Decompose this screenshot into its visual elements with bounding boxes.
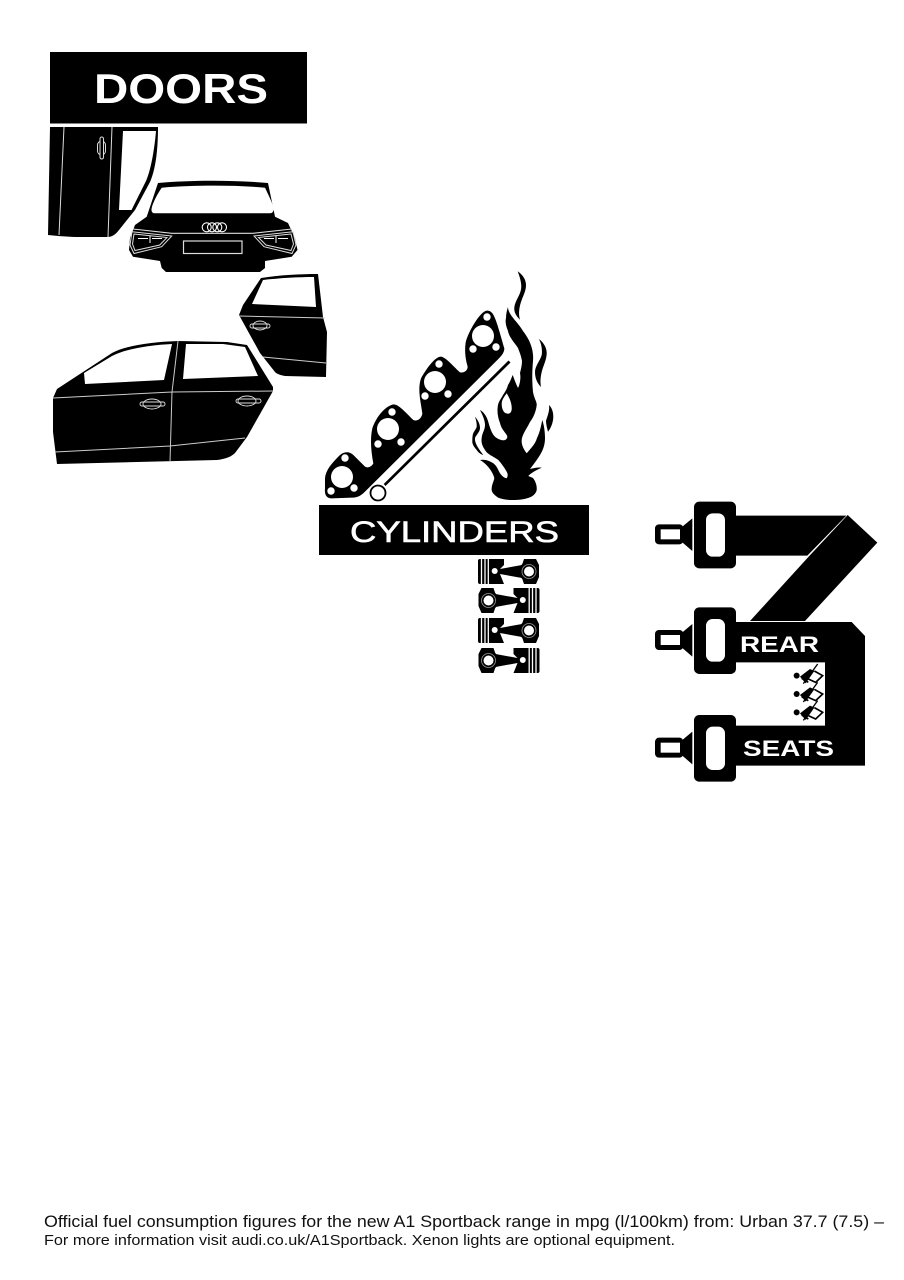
panel: four cylinders bbox=[319, 271, 589, 673]
icon: flame bbox=[472, 271, 553, 500]
text: REAR: REAR bbox=[740, 632, 819, 657]
icon: piston 3 bbox=[478, 618, 539, 643]
icon: seat belt strap forming the number 3 bbox=[735, 515, 877, 766]
icon: exhaust gasket bbox=[325, 311, 504, 498]
icon: right door bbox=[239, 274, 327, 377]
heading: DOORS bbox=[50, 52, 307, 124]
icon: piston 1 bbox=[478, 559, 539, 584]
icon: tail lights bbox=[130, 232, 296, 254]
icon: seated passenger 3 bbox=[794, 701, 823, 720]
text: fuel consumption footnote bbox=[44, 1212, 885, 1249]
icon: piston 4 bbox=[478, 648, 540, 673]
icon: four rings logo bbox=[202, 223, 226, 232]
heading: DOORS: DOORS bbox=[94, 65, 268, 112]
icon: middle buckle bbox=[655, 607, 736, 674]
text: SEATS: SEATS bbox=[743, 736, 834, 761]
icon: piston 2 bbox=[478, 588, 540, 613]
heading: CYLINDERS: CYLINDERS bbox=[350, 516, 559, 549]
text: fuel consumption footnote: Official fuel consumption figures for the new A1 Sportback range in mpg (l/100km) from: Urban 37.7 (7.5) – bbox=[44, 1212, 885, 1231]
panel: five doors bbox=[48, 52, 327, 464]
text: fuel consumption footnote: For more information visit audi.co.uk/A1Sportback. Xenon lights are optional equipment. bbox=[44, 1232, 675, 1249]
icon: seated passenger 1 bbox=[794, 664, 823, 684]
icon: dipstick rod bbox=[370, 360, 510, 500]
icon: bottom buckle bbox=[655, 715, 736, 782]
panel: three rear seats bbox=[655, 502, 877, 782]
heading: CYLINDERS bbox=[319, 505, 589, 555]
icon: two side doors bbox=[53, 341, 273, 464]
icon: seated passenger 2 bbox=[794, 682, 823, 702]
icon: top door bbox=[48, 127, 158, 237]
icon: top buckle bbox=[655, 502, 736, 568]
icon: rear of car bbox=[129, 181, 298, 272]
